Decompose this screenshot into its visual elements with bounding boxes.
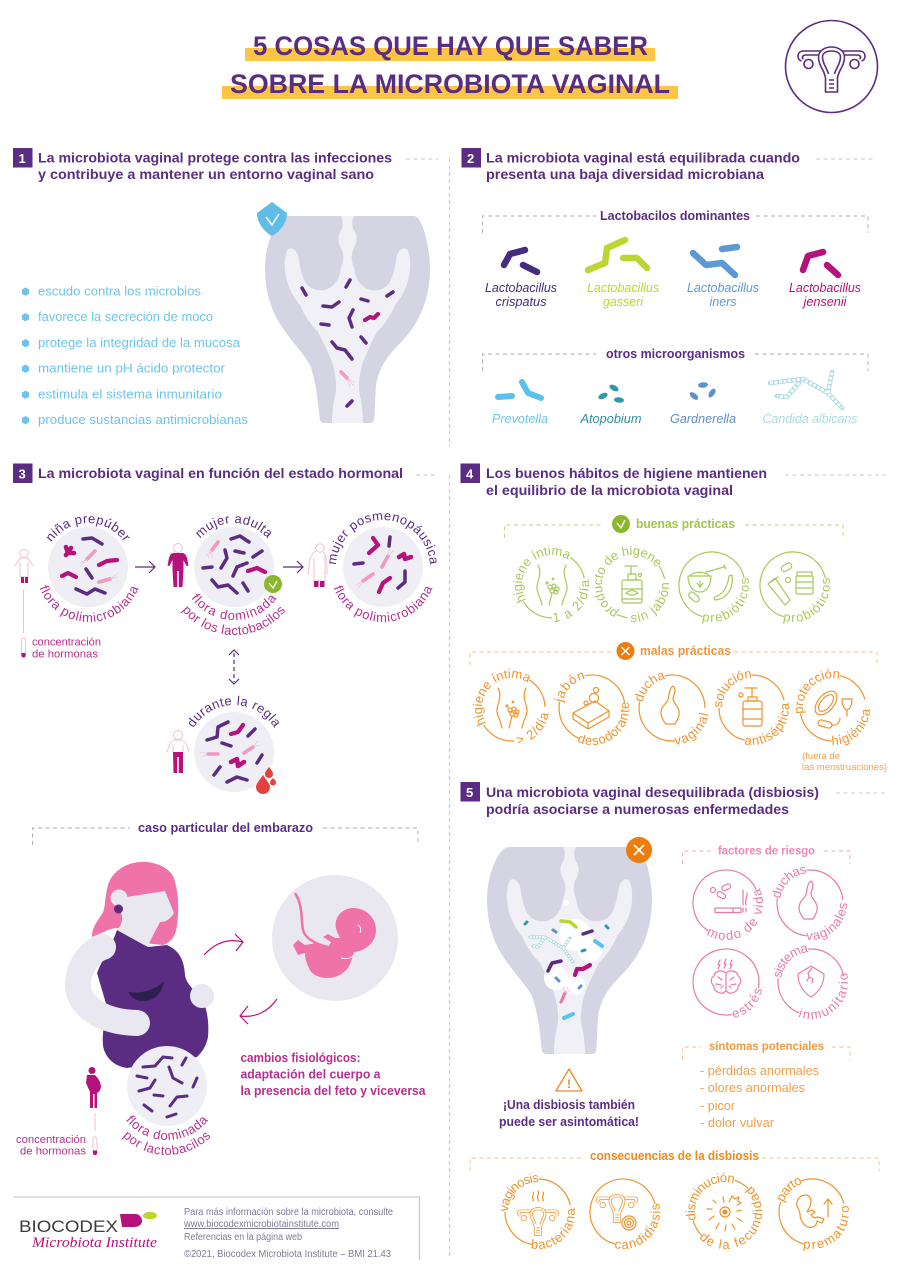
stage: adult woman: mujer adulta [196, 516, 271, 538]
species: gardnerella [670, 382, 736, 426]
benefits list: protege la integridad de la mucosa [38, 335, 241, 350]
stage: prepubescent girl [40, 516, 138, 622]
microbiota circle: pregnancy [121, 1046, 210, 1156]
species: crispatus [485, 250, 557, 309]
species: jensenii [789, 252, 861, 309]
footer text: Para más información sobre la microbiota, consulte [184, 1207, 393, 1218]
text: physiological changes: cambios fisiológicos: [240, 1050, 360, 1065]
icon: hygiene more than 2: > 2/día [516, 713, 549, 744]
heading 5: Una microbiota vaginal desequilibrada (disbiosis) [486, 784, 819, 800]
species: crispatus: Lactobacillus [485, 281, 557, 295]
heading 5 [460, 782, 888, 817]
callout: asymptomatic [499, 1098, 639, 1129]
species: prevotella: Prevotella [492, 412, 548, 426]
microbiota circle: pregnancy: flora dominada [126, 1116, 208, 1140]
consequence icons [501, 1172, 849, 1251]
icon: lifestyle [692, 869, 763, 940]
note: outside periods [802, 751, 887, 773]
icon: lifestyle: modo de vida [707, 888, 763, 940]
icon: stress [692, 948, 762, 1018]
stage: menstruation: durante la regla [188, 696, 279, 728]
icon: reduced fertility: de la fecundidad [700, 1186, 762, 1250]
icon: probiotics: probióticos [783, 578, 830, 624]
bracket: good practices: buenas prácticas [636, 517, 735, 531]
icon: warning: ! [567, 1077, 571, 1091]
illustration: pregnant woman [78, 862, 214, 1068]
species: prevotella [492, 382, 548, 426]
symptoms list [700, 1064, 819, 1130]
icon: bacterial vaginosis: bacteriana [531, 1208, 576, 1249]
icon: prebiotics: prebióticos [702, 578, 749, 624]
figure: menstruating woman [167, 730, 189, 773]
good practice icons [512, 546, 830, 624]
fetus circle [272, 875, 398, 1001]
footer text: Referencias en la página web [184, 1232, 302, 1243]
hormone gauge: girl: de hormonas [32, 648, 99, 660]
heading 2: presenta una baja diversidad microbiana [486, 166, 764, 182]
panel: section 1 [13, 148, 438, 427]
species: gasseri: Lactobacillus [587, 281, 659, 295]
icon: warning [556, 1069, 582, 1091]
symptoms list: - dolor vulvar [700, 1116, 774, 1130]
icon: probiotics [759, 551, 830, 624]
bracket: consequences [470, 1149, 879, 1171]
bracket: bad practices [470, 642, 877, 665]
panel: footer [13, 1197, 420, 1260]
panel: section 3 [13, 464, 436, 1158]
benefits list [22, 284, 249, 427]
icon: antiseptic solution: antiséptica [745, 702, 790, 746]
heading 1: 1 [18, 151, 26, 166]
stage: adult woman [180, 516, 285, 636]
heading 1: y contribuye a mantener un entorno vaginal sano [38, 166, 374, 182]
icon: hygiene more than 2: higiene íntima [472, 668, 530, 726]
callout: asymptomatic: ¡Una disbiosis también [503, 1098, 635, 1112]
icon: douches: vaginales [806, 903, 847, 940]
logo: Microbiota Institute [31, 1235, 157, 1251]
heading 3: La microbiota vaginal en función del estado hormonal [38, 465, 403, 481]
species: atopobium: Atopobium [579, 412, 642, 426]
species: gardnerella: Gardnerella [670, 412, 736, 426]
icon: antiseptic solution [715, 670, 790, 746]
microbiota circle: pregnancy: por lactobacilos [121, 1132, 210, 1156]
benefits list: mantiene un pH ácido protector [38, 360, 226, 376]
stage: prepubescent girl: flora polimicrobiana [40, 585, 138, 622]
species: candida [762, 372, 858, 426]
title: 5 COSAS QUE HAY QUE SABER [253, 31, 648, 61]
hormone gauge: girl [22, 590, 101, 660]
heading 4: 4 [466, 466, 474, 482]
footer text: www.biocodexmicrobiotainstitute.com [183, 1219, 339, 1230]
bracket: symptoms [682, 1039, 850, 1060]
benefits list: estimula el sistema inmunitario [38, 386, 222, 402]
icon: stress: estrés [732, 988, 762, 1018]
stage: adult woman: flora dominada [192, 594, 277, 620]
icon: bacterial vaginosis: vaginosis [501, 1173, 538, 1212]
note: outside periods: (fuera de [802, 751, 840, 762]
uterus cross-section healthy [265, 216, 430, 423]
icon: vaginal douche: ducha [634, 672, 666, 702]
stage: postmenopausal woman: flora polimicrobiana [334, 585, 432, 622]
icon: vaginal douche: vaginal [674, 712, 708, 744]
icon: hygiene 1-2 per day: higiene íntima [512, 546, 570, 604]
icon: prebiotics [678, 551, 749, 624]
benefits list: favorece la secreción de moco [38, 309, 213, 324]
heading 2: La microbiota vaginal está equilibrada cuando [486, 150, 800, 166]
bracket: consequences: consecuencias de la disbiosis [590, 1149, 759, 1163]
icon: immune system: inmunitario [798, 974, 848, 1020]
species: atopobium [579, 383, 642, 426]
heading 2: 2 [467, 151, 474, 166]
icon: soap-free product: producto de higene [594, 546, 660, 618]
stage: menstruation [188, 696, 279, 794]
symptoms list: - picor [700, 1099, 735, 1113]
hormone gauge: pregnancy [16, 1113, 97, 1158]
heading 5: 5 [466, 785, 473, 800]
species: jensenii: Lactobacillus [789, 281, 861, 295]
stage: postmenopausal woman [329, 513, 436, 622]
text: physiological changes [240, 1050, 426, 1098]
title: SOBRE LA MICROBIOTA VAGINAL [230, 69, 670, 99]
heading 4: el equilibrio de la microbiota vaginal [486, 482, 733, 498]
benefits list: produce sustancias antimicrobianas [38, 412, 249, 427]
icon: douches [772, 866, 847, 940]
bracket: dominant lactobacilli [482, 209, 868, 233]
icon: hygiene more than 2 [472, 668, 549, 744]
icon: candidiasis: candidiasis [615, 1204, 660, 1250]
bracket: symptoms: síntomas potenciales [709, 1039, 824, 1053]
icon: reduced fertility: disminución [686, 1172, 734, 1220]
footer text [183, 1207, 393, 1260]
icon: douches: duchas [772, 866, 806, 898]
bracket: dominant lactobacilli: Lactobacilos dominantes [600, 209, 750, 223]
species: candida: Candida albicans [762, 412, 858, 426]
species: crispatus: crispatus [496, 295, 546, 309]
heading 4: Los buenos hábitos de higiene mantienen [486, 465, 767, 481]
heading 1: La microbiota vaginal protege contra las infecciones [38, 150, 392, 166]
icon: candidiasis [589, 1178, 660, 1250]
icon: vaginal douche [634, 672, 708, 744]
hormone gauge: pregnancy: concentración [16, 1134, 86, 1146]
bracket: risk factors: factores de riesgo [718, 844, 815, 858]
heading 3 [13, 464, 438, 483]
footer text: ©2021, Biocodex Microbiota Institute – BMI 21.43 [184, 1249, 391, 1260]
bad practice icons [472, 668, 870, 746]
species: iners [687, 247, 759, 309]
stage: prepubescent girl: niña prepúber [46, 516, 130, 542]
dashed double arrow [229, 650, 239, 684]
panel: section 5 [460, 782, 885, 1251]
figure: girl [15, 549, 33, 583]
arrow [135, 561, 155, 573]
icon: hygiene 1-2 per day: 1 a 2/día [554, 580, 590, 622]
hormone gauge: girl: concentración [32, 637, 101, 649]
bracket: good practices [504, 515, 843, 538]
heading 4 [460, 464, 888, 498]
icon: immune system [774, 946, 848, 1020]
panel: section 4 [460, 464, 887, 773]
icon: bacterial vaginosis [501, 1173, 576, 1249]
figure: pregnant woman small [86, 1067, 101, 1108]
icon: shield check [257, 202, 287, 236]
heading 1 [13, 148, 438, 182]
logo [19, 1212, 157, 1251]
icon: deodorant soap: jabón [554, 672, 585, 704]
figure: older woman [308, 544, 327, 587]
risk factor icons [692, 866, 848, 1020]
figure: adult woman [168, 544, 188, 587]
icon: uterus badge [786, 20, 878, 112]
icon: hygiene 1-2 per day [512, 546, 590, 622]
icon: soap-free product: sin jabón [631, 583, 670, 622]
stage: postmenopausal woman: mujer posmenopáusica [329, 513, 436, 564]
species: iners: iners [710, 295, 736, 309]
benefits list: escudo contra los microbios [38, 284, 201, 299]
callout: asymptomatic: puede ser asintomática! [499, 1115, 639, 1129]
species: gasseri: gasseri [603, 295, 644, 309]
heading 2 [462, 148, 874, 182]
species: gasseri [587, 240, 659, 309]
title [222, 31, 678, 99]
logo: BIOCODEX [19, 1217, 118, 1236]
icon: immune system: sistema [774, 946, 808, 978]
heading 5: podría asociarse a numerosas enfermedades [486, 801, 789, 817]
text: physiological changes: adaptación del cuerpo a [240, 1066, 381, 1082]
icon: deodorant soap: desodorante [578, 702, 629, 745]
icon: sanitary protection: higiénica [832, 709, 870, 746]
panel: section 2 [462, 148, 874, 426]
icon: premature birth: prematuro [803, 1206, 849, 1251]
arrow: to fetus [204, 934, 243, 955]
hormone gauge: pregnancy: de hormonas [20, 1146, 87, 1158]
icon: deodorant soap [554, 672, 629, 745]
bracket: pregnancy: caso particular del embarazo [138, 821, 313, 835]
icon: sanitary protection: protección [796, 668, 840, 714]
icon: premature birth [778, 1178, 849, 1251]
symptoms list: - olores anormales [700, 1081, 805, 1095]
arrow [283, 561, 303, 573]
icon: X badge [626, 837, 652, 863]
species: iners: Lactobacillus [687, 281, 759, 295]
stage: adult woman: por los lactobacilos [180, 606, 285, 636]
symptoms list: - pérdidas anormales [700, 1064, 819, 1078]
bracket: other microorganisms: otros microorganismos [606, 347, 745, 361]
bracket: bad practices: malas prácticas [640, 644, 731, 658]
icon: premature birth: parto [778, 1178, 802, 1203]
note: outside periods: las menstruaciones) [802, 762, 887, 773]
icon: sanitary protection [796, 668, 870, 746]
panel dividers [448, 158, 450, 1257]
bracket: other microorganisms [482, 347, 868, 371]
text: physiological changes: la presencia del feto y viceversa [240, 1083, 426, 1098]
icon: antiseptic solution: solución [715, 670, 752, 708]
bracket: pregnancy [32, 821, 418, 845]
icon: reduced fertility [686, 1172, 762, 1250]
uterus cross-section dysbiosis [487, 847, 652, 1054]
bracket: risk factors [682, 844, 850, 864]
heading 3: 3 [18, 466, 26, 482]
arrow: to mother [240, 999, 277, 1024]
species: jensenii: jensenii [801, 295, 848, 309]
